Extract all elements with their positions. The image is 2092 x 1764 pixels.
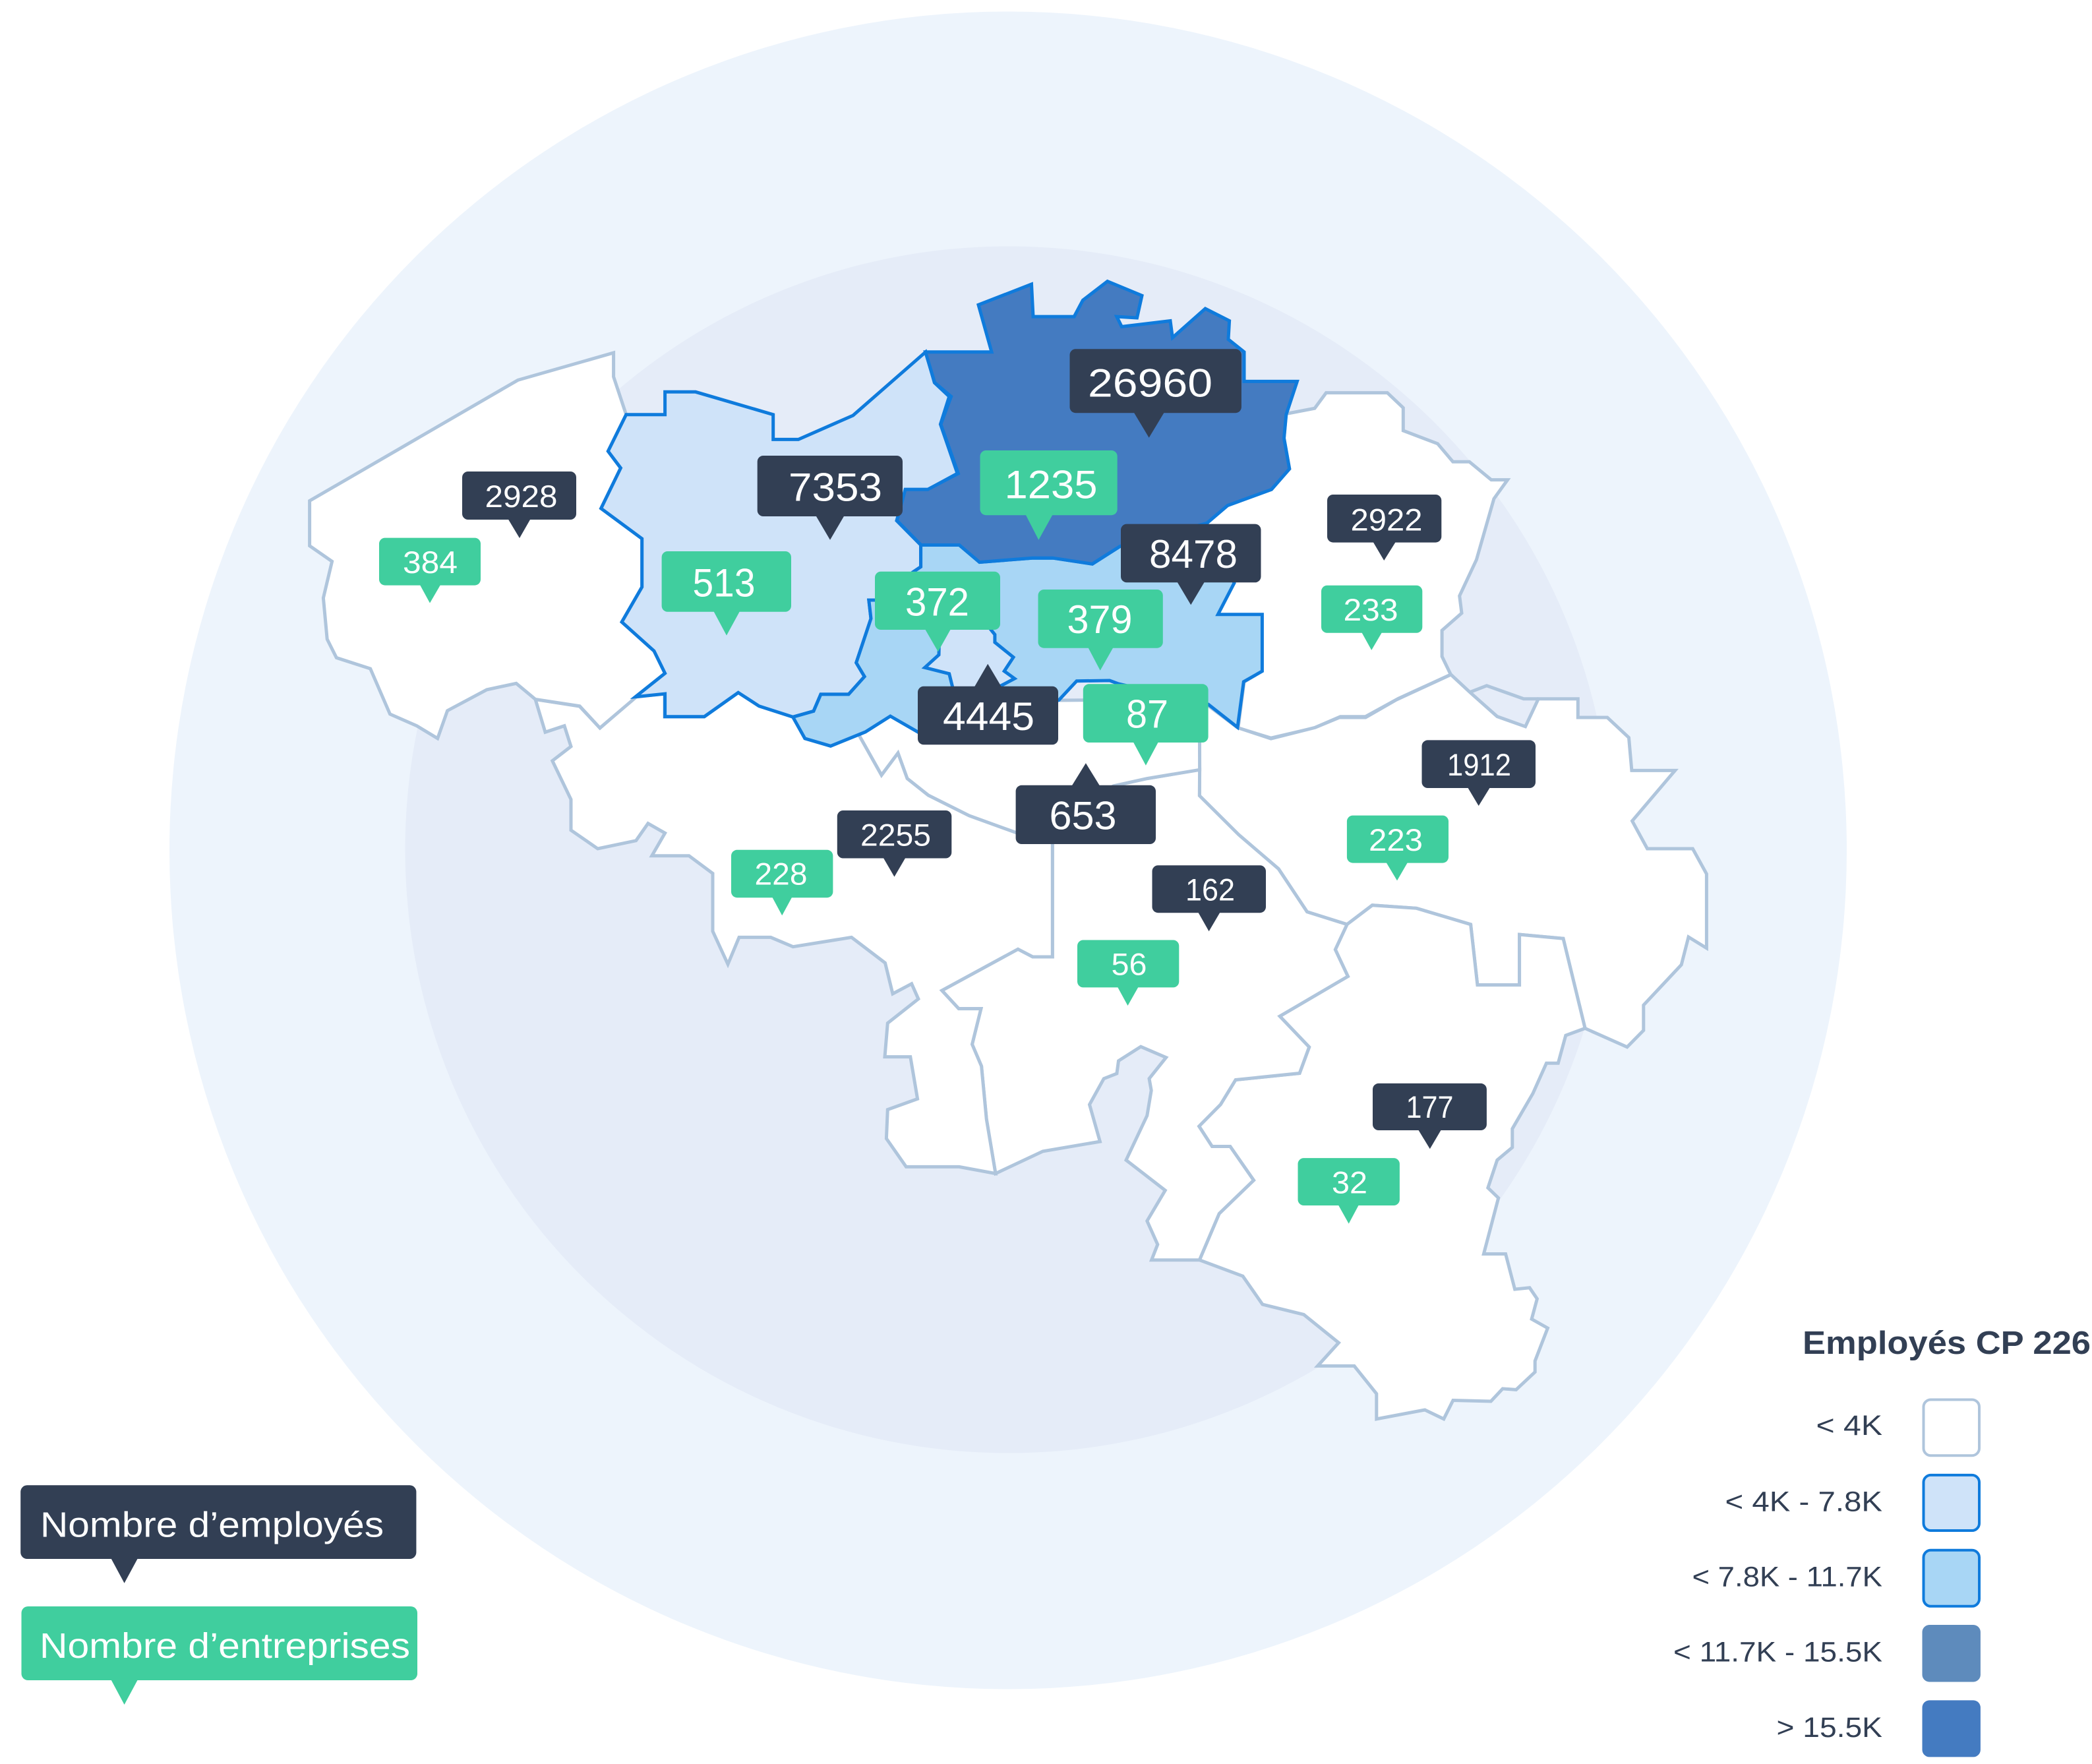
region: Hainaut xyxy=(535,692,1052,1174)
companies: 513 xyxy=(662,551,791,636)
region: Luxembourg xyxy=(1199,905,1585,1419)
employees: 7353 xyxy=(758,456,903,540)
region: Flemish Brabant xyxy=(793,523,1262,746)
employees: 162: 162 xyxy=(1185,872,1235,907)
legend item: employees: Nombre d’employés xyxy=(40,1505,384,1545)
legend item: employees xyxy=(20,1485,416,1583)
employees: 653 xyxy=(1016,763,1156,844)
companies: 32: 32 xyxy=(1332,1165,1367,1200)
companies: 1235 xyxy=(980,450,1118,540)
employees: 177: 177 xyxy=(1406,1089,1453,1124)
map of Belgium xyxy=(310,282,1706,1419)
companies: 233 xyxy=(1321,586,1422,650)
companies: 56 xyxy=(1077,940,1179,1006)
employees: 26960 xyxy=(1069,349,1241,438)
legend row: 11.7K to 15.5K xyxy=(1673,1625,1981,1682)
companies: 379 xyxy=(1038,590,1163,671)
region: West Flanders xyxy=(310,353,665,739)
companies: 32 xyxy=(1298,1158,1400,1224)
legend row: under 4K: < 4K xyxy=(1816,1410,1882,1442)
companies: 223: 223 xyxy=(1369,822,1423,857)
background circles xyxy=(169,12,1847,1689)
employees: 7353: 7353 xyxy=(789,466,882,509)
employees: 162 xyxy=(1152,865,1266,931)
companies: 513: 513 xyxy=(692,561,756,605)
employees: 8478 xyxy=(1121,524,1261,605)
legend row: 7.8K to 11.7K: < 7.8K - 11.7K xyxy=(1692,1562,1882,1593)
companies: 384 xyxy=(379,538,481,603)
employees: 4445 xyxy=(918,664,1058,745)
legend row: 4K to 7.8K xyxy=(1725,1475,1979,1531)
employees: 2922: 2922 xyxy=(1350,502,1423,537)
companies: 379: 379 xyxy=(1067,597,1133,642)
region: Liège xyxy=(1199,675,1706,1047)
employees: 1912: 1912 xyxy=(1447,747,1511,782)
employees: 653: 653 xyxy=(1050,794,1117,837)
companies: 372: 372 xyxy=(905,580,969,624)
companies: 223 xyxy=(1347,816,1449,880)
legend: colour scale xyxy=(1673,1325,2091,1757)
companies: 87: 87 xyxy=(1126,692,1168,736)
region: East Flanders xyxy=(601,352,957,717)
employees: 177 xyxy=(1373,1083,1487,1149)
region: Walloon Brabant xyxy=(859,699,1200,833)
employees: 8478: 8478 xyxy=(1149,532,1238,576)
legend: bubble types xyxy=(20,1485,417,1705)
legend row: 11.7K to 15.5K: < 11.7K - 15.5K xyxy=(1673,1636,1882,1668)
legend title: Employés CP 226 xyxy=(1803,1325,2091,1361)
legend row: over 15.5K xyxy=(1776,1700,1981,1757)
region: Antwerp xyxy=(897,282,1297,564)
companies: 384: 384 xyxy=(403,545,458,580)
legend row: 7.8K to 11.7K xyxy=(1692,1550,1979,1606)
legend row: 4K to 7.8K: < 4K - 7.8K xyxy=(1725,1486,1882,1518)
legend row: under 4K xyxy=(1816,1399,1979,1455)
companies: 228 xyxy=(731,850,833,915)
companies: 1235: 1235 xyxy=(1005,463,1097,506)
region: Namur xyxy=(942,770,1348,1260)
employees: 2928: 2928 xyxy=(485,479,558,514)
region: Brussels xyxy=(925,623,1015,699)
data bubbles xyxy=(379,349,1536,1224)
employees: 1912 xyxy=(1421,740,1536,806)
legend row: over 15.5K: > 15.5K xyxy=(1776,1712,1882,1744)
legend item: companies: Nombre d’entreprises xyxy=(40,1626,410,1666)
employees: 2255 xyxy=(837,810,951,877)
companies: 87 xyxy=(1083,684,1209,766)
employees: 2928 xyxy=(462,471,576,538)
employees: 4445: 4445 xyxy=(943,694,1034,739)
companies: 56: 56 xyxy=(1112,947,1147,982)
employees: 2922 xyxy=(1327,495,1441,561)
companies: 233: 233 xyxy=(1344,592,1398,627)
region: Limburg xyxy=(1207,393,1508,738)
region: Liège enclave outline xyxy=(1470,686,1538,699)
legend item: companies xyxy=(21,1606,417,1705)
companies: 372 xyxy=(875,572,1000,652)
companies: 228: 228 xyxy=(754,856,807,891)
employees: 2255: 2255 xyxy=(860,818,931,853)
employees: 26960: 26960 xyxy=(1088,361,1212,405)
